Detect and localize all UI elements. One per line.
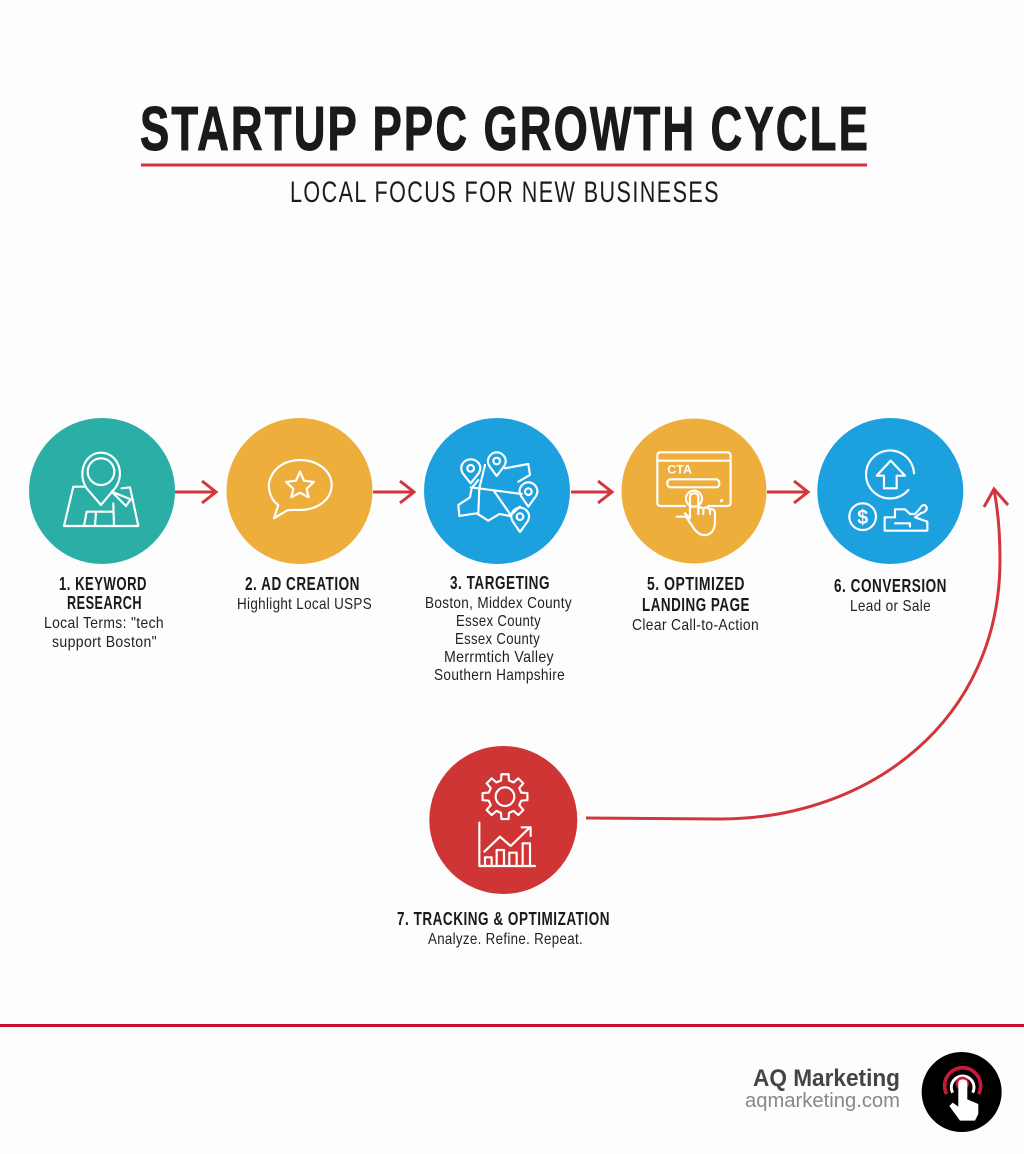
label: Essex County <box>455 631 540 648</box>
step 6: conversion <box>817 418 963 615</box>
icon: AQ Marketing logo <box>922 1052 1002 1132</box>
label <box>632 574 759 634</box>
label: Boston, Middex County <box>425 595 572 612</box>
label: 1. KEYWORD <box>59 574 147 594</box>
icon: CTA screen with pointing hand <box>657 452 731 535</box>
circle: blue <box>817 418 963 564</box>
step 3: targeting <box>424 418 572 684</box>
arrow: step 3 to 5 <box>571 481 612 503</box>
circle: blue <box>424 418 570 564</box>
step 2: ad creation <box>226 418 372 613</box>
label: Local Terms: "tech <box>44 615 164 632</box>
label: RESEARCH <box>67 593 142 613</box>
circle: red <box>429 746 577 894</box>
circle: orange <box>226 418 372 564</box>
subtitle: LOCAL FOCUS FOR NEW BUSINESES <box>290 176 720 209</box>
arrow: loop back from tracking to conversion <box>586 489 1008 819</box>
step 7: tracking and optimization <box>397 746 610 948</box>
label: support Boston" <box>52 634 157 651</box>
label: Analyze. Refine. Repeat. <box>428 931 583 948</box>
icon: map with pin <box>64 453 138 526</box>
icon: up arrow, dollar coin and puzzle pieces <box>849 450 927 531</box>
icon: regional map with pins <box>458 452 537 532</box>
arrow: step 1 to 2 <box>175 481 216 503</box>
label <box>44 574 164 651</box>
icon: speech bubble with star <box>269 460 332 518</box>
label: 3. TARGETING <box>450 573 550 593</box>
label: 7. TRACKING & OPTIMIZATION <box>397 909 610 929</box>
icon: up arrow, dollar coin and puzzle pieces: $ <box>857 507 868 529</box>
icon: gear and growth chart <box>479 774 535 866</box>
circle: orange <box>622 418 766 564</box>
footer brand text: aqmarketing.com <box>745 1090 900 1112</box>
label: LANDING PAGE <box>642 595 750 615</box>
label: Essex County <box>456 613 541 630</box>
footer brand text <box>745 1065 900 1112</box>
arrow: step 2 to 3 <box>373 481 414 503</box>
step 1: keyword research <box>29 418 175 651</box>
footer divider <box>0 1024 1024 1027</box>
label: 6. CONVERSION <box>834 576 947 596</box>
label: 2. AD CREATION <box>245 574 360 594</box>
label: Clear Call-to-Action <box>632 617 759 634</box>
label <box>425 573 572 684</box>
label: Highlight Local USPS <box>237 596 372 613</box>
icon: CTA screen with pointing hand: CTA <box>667 462 692 476</box>
label: Southern Hampshire <box>434 667 565 684</box>
label <box>834 576 947 615</box>
label: Merrmtich Valley <box>444 649 554 666</box>
arrow: step 5 to 6 <box>767 481 808 503</box>
footer brand text: AQ Marketing <box>753 1065 900 1092</box>
label <box>237 574 372 613</box>
step 5: optimized landing page <box>622 418 766 634</box>
label: 5. OPTIMIZED <box>647 574 745 594</box>
label: Lead or Sale <box>850 598 931 615</box>
label <box>397 909 610 948</box>
circle: teal <box>29 418 175 564</box>
